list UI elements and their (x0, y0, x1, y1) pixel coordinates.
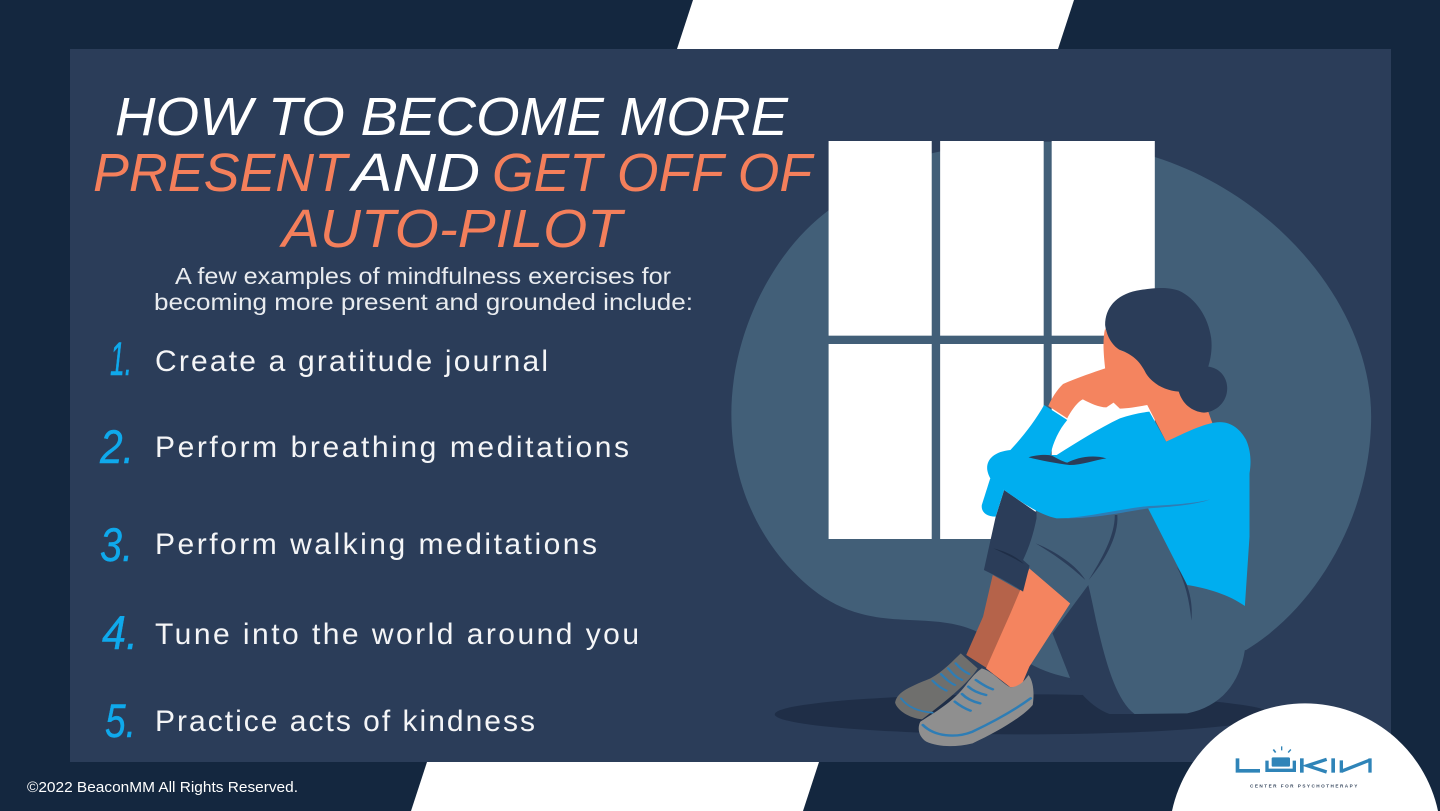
title: HOW TO BECOME MORE (115, 87, 789, 147)
list item 2: Perform breathing meditations (155, 431, 629, 464)
face, neck and hand (1048, 328, 1212, 442)
list item 4: 4. (102, 606, 138, 659)
subtitle: becoming more present and grounded include: (154, 289, 693, 315)
list item 4 (102, 606, 639, 659)
illustration: woman by window (731, 141, 1371, 746)
near pant cuff (1023, 503, 1149, 603)
floor shadow (775, 694, 1271, 734)
logo tagline: CENTER FOR PSYCHOTHERAPY (1250, 783, 1358, 788)
list item 1: Create a gratitude journal (155, 345, 548, 378)
list item 4: Tune into the world around you (155, 618, 639, 651)
near shoe (919, 668, 1034, 746)
list item 5: Practice acts of kindness (155, 705, 535, 738)
title: AND (349, 143, 480, 203)
logo badge (1172, 703, 1438, 811)
window (829, 141, 1155, 539)
title: GET OFF OF (492, 143, 815, 203)
title: PRESENT (93, 143, 351, 203)
list item 3 (100, 518, 597, 571)
title (93, 87, 815, 259)
hair (1105, 288, 1227, 413)
bottom white parallelogram (411, 762, 819, 811)
top white parallelogram (677, 0, 1074, 49)
shoe laces and stripes (901, 663, 1031, 736)
forearm lower sleeve (982, 478, 1004, 517)
near calf (986, 568, 1070, 687)
background blob (731, 142, 1371, 678)
sleeve shadows (1029, 455, 1106, 465)
logo mark (1236, 746, 1370, 773)
far shoe (895, 653, 978, 719)
list item 5 (105, 694, 535, 747)
subtitle: A few examples of mindfulness exercises for (175, 263, 671, 289)
hips and pants (1023, 503, 1245, 714)
far pant leg (984, 490, 1038, 592)
list item 2: 2. (99, 420, 134, 473)
subtitle (154, 263, 693, 315)
title: AUTO-PILOT (279, 199, 626, 259)
list item 1 (110, 332, 548, 385)
copyright: ©2022 BeaconMM All Rights Reserved. (27, 779, 298, 796)
dark thigh (1053, 585, 1141, 714)
pant fold lines (994, 515, 1192, 621)
sweater (987, 405, 1251, 606)
list item 3: 3. (100, 518, 133, 571)
list item 2 (99, 420, 629, 473)
logo (1236, 746, 1370, 788)
list item 1: 1. (110, 332, 132, 385)
list item 3: Perform walking meditations (155, 528, 597, 561)
far calf (966, 575, 1022, 668)
list item 5: 5. (105, 694, 136, 747)
